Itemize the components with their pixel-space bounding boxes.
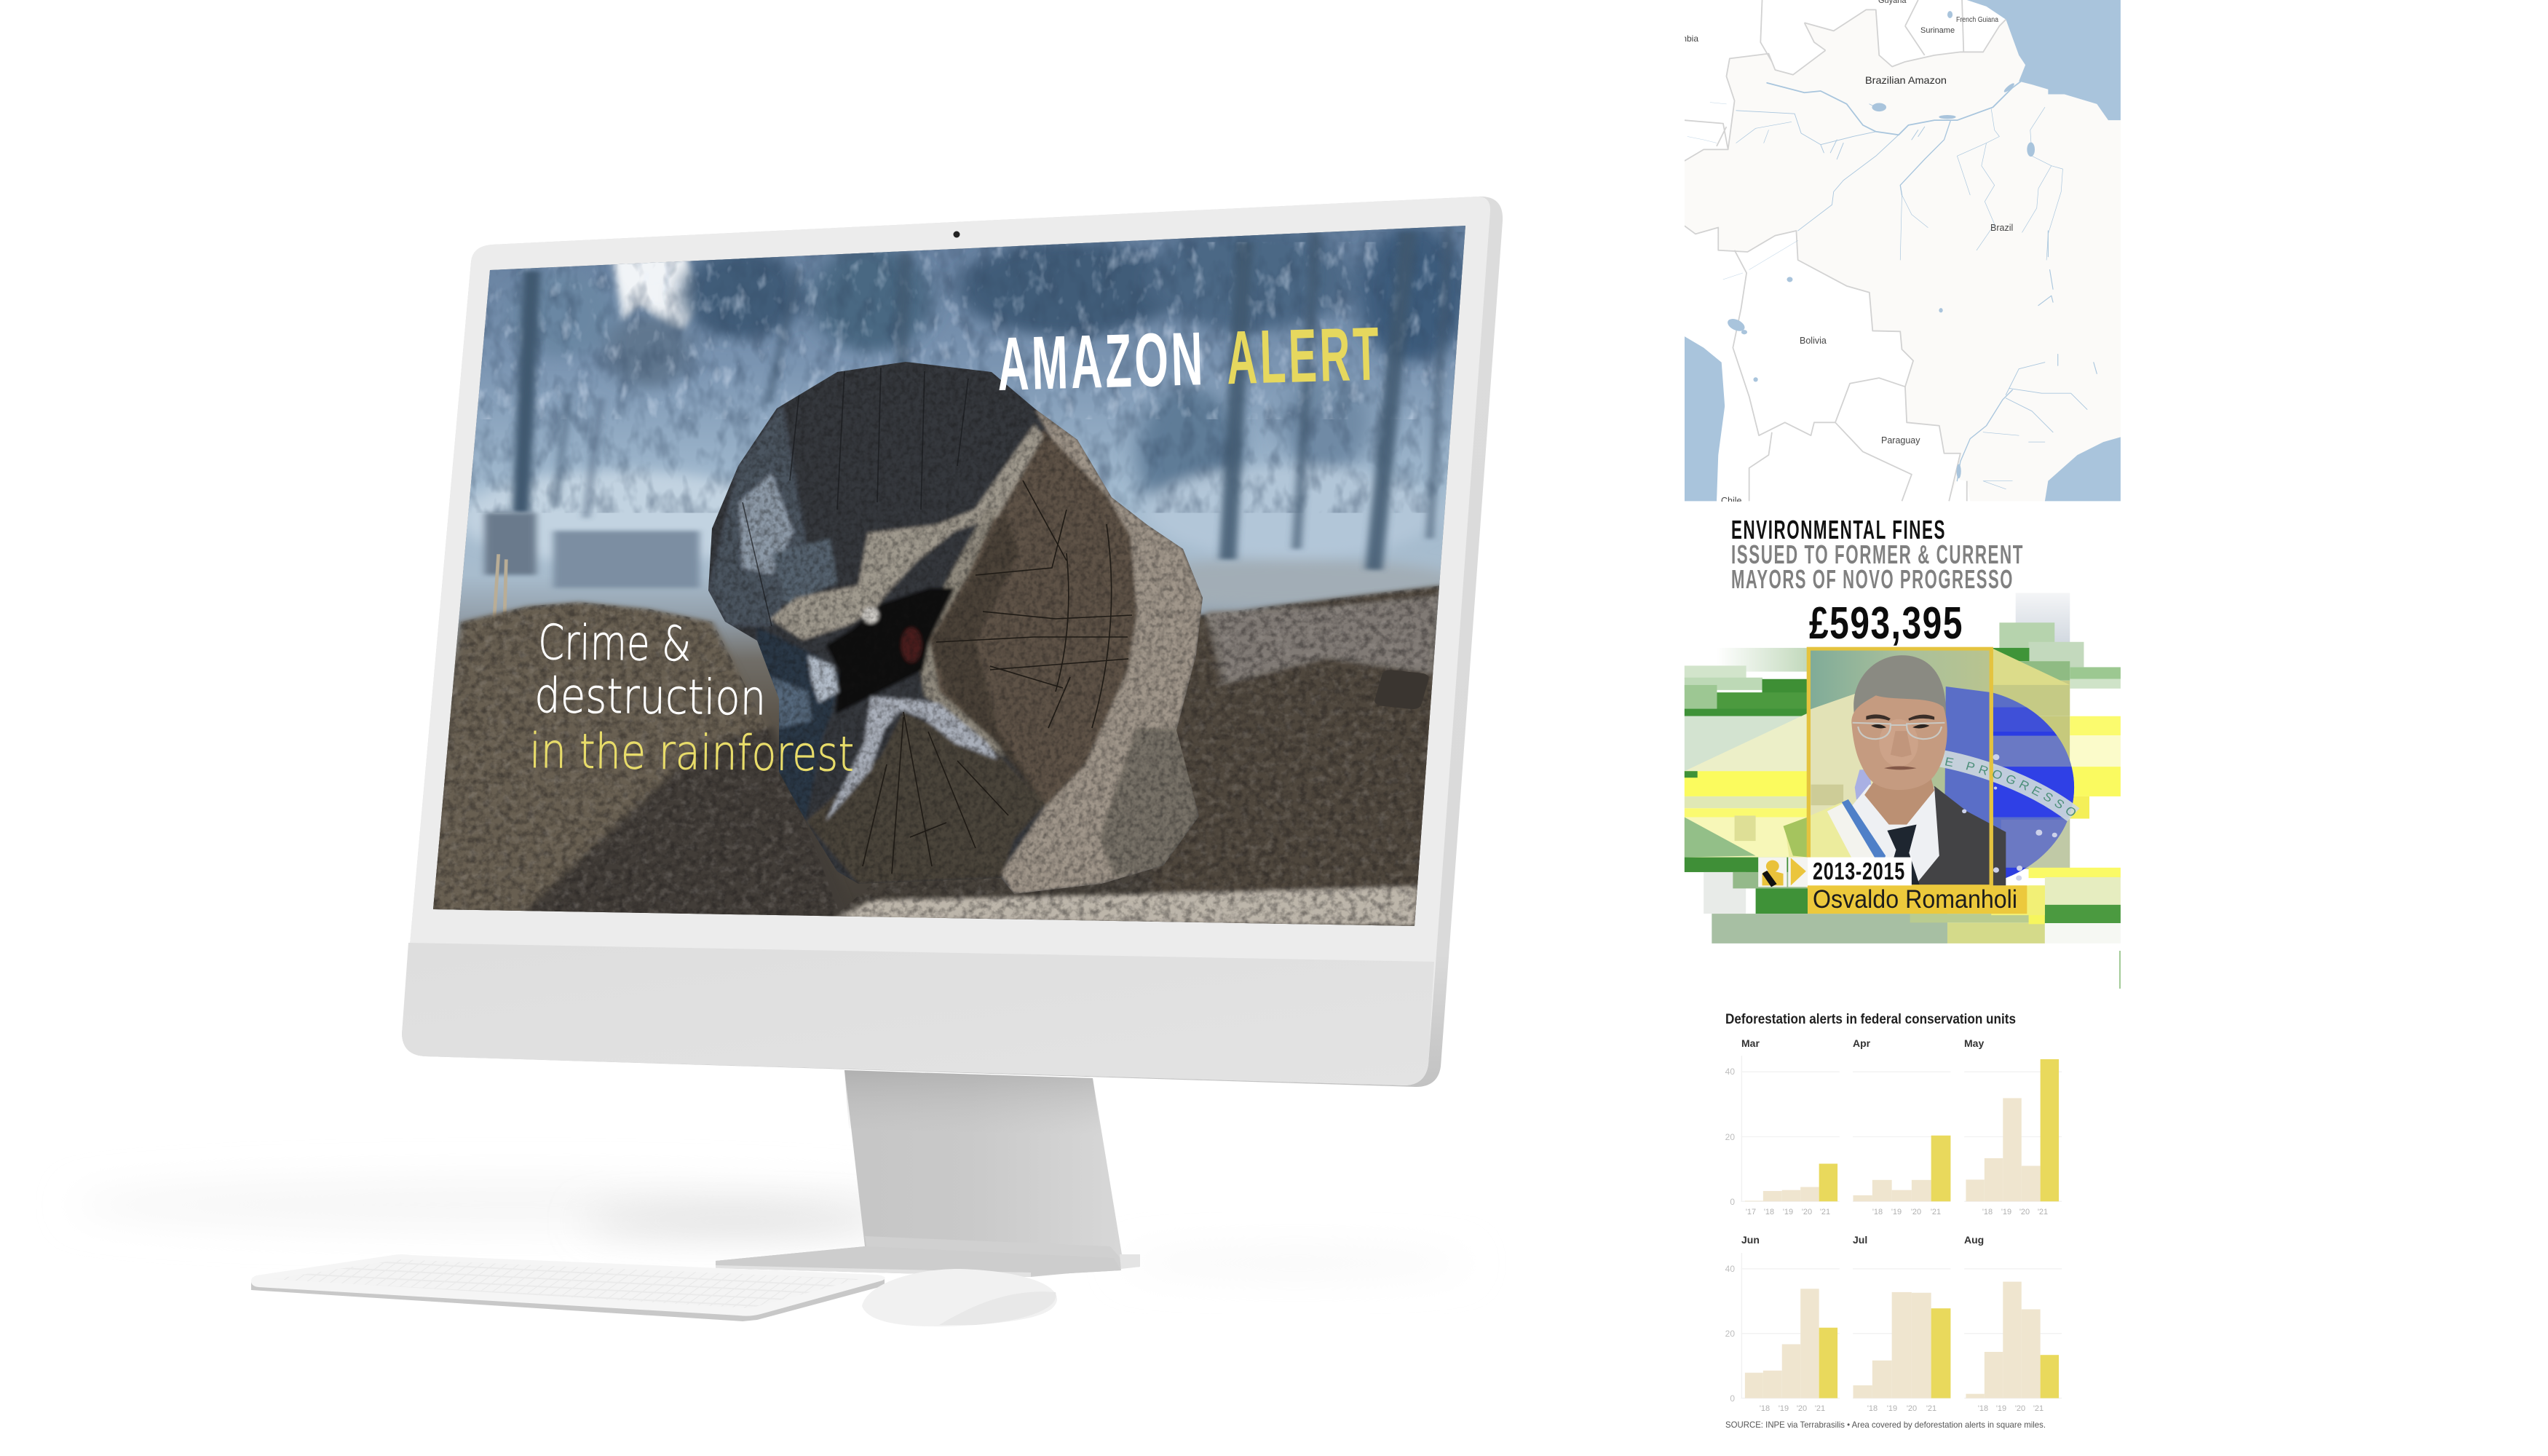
map labels (1661, 0, 2013, 506)
Apr bars (1853, 1136, 1950, 1201)
map labels: Suriname (1920, 26, 1955, 35)
x axis labels: '20 (1797, 1404, 1807, 1413)
mouse (862, 1269, 1057, 1326)
x axis labels: '20 (2015, 1404, 2025, 1413)
floor shadow (73, 1183, 1471, 1273)
motto band (1938, 758, 2073, 815)
x axis labels: '19 (1996, 1404, 2006, 1413)
screen subtitle: destruction (534, 668, 767, 726)
photo frame (1808, 649, 1991, 887)
portrait (1784, 655, 2006, 885)
chart bars (1741, 1056, 2062, 1398)
Mar bars (1745, 1163, 1837, 1201)
fines heading: ENVIRONMENTAL FINES (1731, 515, 1946, 545)
x axis labels: '18 (1764, 1208, 1774, 1216)
edge marker (2119, 951, 2121, 989)
x axis labels: '20 (2019, 1208, 2030, 1216)
month labels: May (1964, 1037, 1984, 1049)
y axis labels: 40 (1725, 1264, 1735, 1274)
chart title: Deforestation alerts in federal conservation units (1725, 1011, 2016, 1027)
screen subtitle (533, 622, 853, 772)
flag globe (1837, 681, 2078, 895)
x axis labels: '19 (1779, 1404, 1789, 1413)
month labels: Aug (1964, 1234, 1984, 1246)
stars (1962, 754, 2057, 881)
fines heading: MAYORS OF NOVO PROGRESSO (1731, 564, 2014, 594)
flag collage (1685, 593, 2121, 943)
x axis labels: '19 (1887, 1404, 1897, 1413)
panel: desktop computer mockup (251, 197, 1503, 1326)
name tag icon (1758, 858, 1808, 887)
month labels: Mar (1741, 1037, 1760, 1049)
panel: map of the Brazilian Amazon (1661, 0, 2121, 506)
fine amount: £593,395 (1809, 598, 1963, 649)
x axis labels: '18 (1760, 1404, 1770, 1413)
y axis labels: 0 (1730, 1393, 1735, 1404)
motto text: E PROGRESSO (1945, 757, 2076, 815)
map labels: Bolivia (1800, 336, 1827, 346)
keyboard (251, 1254, 885, 1321)
panel: deforestation bar charts (1725, 1011, 2062, 1430)
x axis labels: '20 (1802, 1208, 1812, 1216)
map labels: Paraguay (1881, 435, 1920, 446)
screen subtitle: Crime & (538, 614, 692, 672)
screen photo: burnt log in the rainforest (424, 218, 1473, 932)
x axis labels: '18 (1867, 1404, 1878, 1413)
map labels: Chile (1721, 496, 1742, 506)
x axis labels: '21 (1926, 1404, 1936, 1413)
name tag text: Osvaldo Romanholi (1813, 885, 2017, 914)
x axis labels: '20 (1907, 1404, 1917, 1413)
map labels: Brazilian Amazon (1865, 74, 1947, 86)
fines heading: ISSUED TO FORMER & CURRENT (1731, 539, 2024, 569)
Jul bars (1853, 1292, 1950, 1398)
x axis labels: '21 (1815, 1404, 1825, 1413)
x axis labels: '18 (1872, 1208, 1883, 1216)
fines heading (1731, 515, 2024, 594)
x axis labels (1746, 1208, 2048, 1413)
monitor stand (716, 1070, 1140, 1277)
y axis labels: 20 (1725, 1329, 1735, 1339)
x axis labels: '19 (2001, 1208, 2011, 1216)
y axis labels (1725, 1067, 1735, 1404)
x axis labels: '21 (2038, 1208, 2048, 1216)
screen title: Amazon Alert: AMAZON (996, 317, 1207, 407)
name tag text: 2013-2015 (1813, 858, 1905, 885)
x axis labels: '19 (1783, 1208, 1793, 1216)
map labels: Brazil (1990, 223, 2013, 233)
month labels (1741, 1037, 1984, 1246)
x axis labels: '21 (1820, 1208, 1830, 1216)
screen title: Amazon Alert (999, 328, 1378, 390)
seas (1685, 0, 2121, 501)
x axis labels: '17 (1746, 1208, 1756, 1216)
name tag text (1813, 858, 2017, 914)
y axis labels: 20 (1725, 1132, 1735, 1142)
map labels: French Guiana (1956, 16, 1998, 24)
panel: environmental fines (1685, 515, 2121, 989)
borders (1685, 0, 2006, 501)
month labels: Jun (1741, 1234, 1760, 1246)
Brazil land (1685, 9, 2121, 501)
x axis labels: '18 (1978, 1404, 1988, 1413)
x axis labels: '20 (1911, 1208, 1921, 1216)
x axis labels: '21 (2033, 1404, 2043, 1413)
month labels: Jul (1853, 1234, 1867, 1246)
month labels: Apr (1853, 1037, 1871, 1049)
screen title: Amazon Alert: ALERT (1225, 312, 1382, 400)
x axis labels: '21 (1931, 1208, 1941, 1216)
log (699, 349, 1223, 903)
screen subtitle: in the rainforest (529, 723, 855, 783)
y axis labels: 0 (1730, 1197, 1735, 1207)
Aug bars (1966, 1282, 2059, 1398)
source note: SOURCE: INPE via Terrabrasilis • Area covered by deforestation alerts in square miles. (1725, 1420, 2046, 1430)
photo frame background (1808, 648, 1991, 885)
ground (429, 585, 1443, 926)
Jun bars (1745, 1289, 1837, 1398)
May bars (1966, 1059, 2059, 1201)
x axis labels: '18 (1982, 1208, 1993, 1216)
lakes (1725, 11, 2035, 478)
rivers (1688, 78, 2097, 489)
x axis labels: '19 (1891, 1208, 1902, 1216)
map labels: Colombia (1661, 33, 1698, 44)
y axis labels: 40 (1725, 1067, 1735, 1077)
monitor body (402, 197, 1503, 1087)
webcam (954, 232, 960, 237)
